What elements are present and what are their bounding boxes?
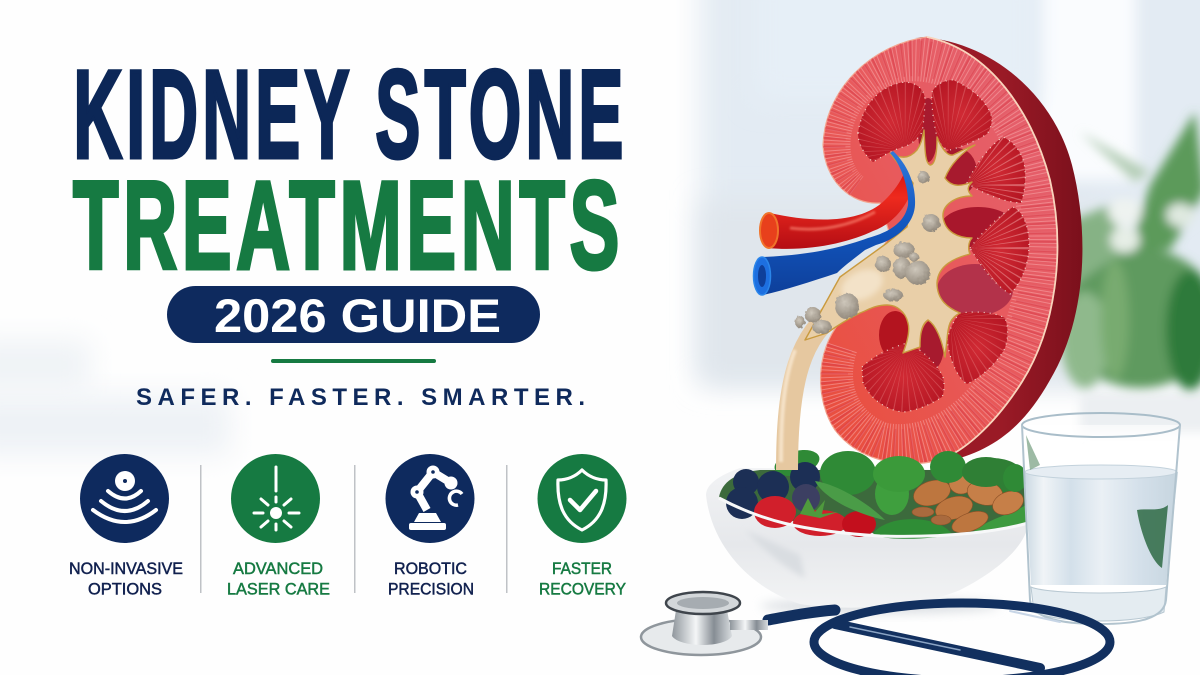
stethoscope: [641, 592, 1110, 675]
label: robotic precision: PRECISION: [388, 580, 474, 598]
label: non-invasive options: OPTIONS: [88, 580, 162, 598]
blueberries: [726, 462, 820, 519]
kidney cross-section: [754, 37, 1082, 470]
tagline: SAFER. FASTER. SMARTER.: [136, 384, 585, 411]
icon: ultrasound waves: [80, 454, 169, 543]
cream rim line: [927, 37, 1057, 460]
strawberries: [754, 496, 876, 537]
label: faster recovery: [539, 559, 626, 598]
ureter: [787, 308, 840, 470]
divider: [506, 465, 508, 593]
label: faster recovery: RECOVERY: [539, 580, 626, 598]
divider: [354, 465, 356, 593]
blurred plant: [1060, 112, 1200, 390]
renal pelvis: [805, 130, 975, 357]
glass of water: [1022, 413, 1180, 624]
label: advanced laser care: ADVANCED: [233, 559, 323, 578]
label: robotic precision: [388, 559, 474, 598]
badge: 2026 guide: [167, 286, 540, 343]
cortex radial hatch: [827, 58, 1041, 447]
renal vein: [754, 151, 915, 295]
medullary pyramids: [858, 80, 1029, 412]
label: advanced laser care: LASER CARE: [227, 580, 330, 598]
almonds: [910, 472, 1027, 537]
badge: 2026 guide: 2026 GUIDE: [214, 289, 501, 342]
chest piece: [641, 592, 768, 655]
spinach: [815, 473, 1026, 539]
icon: laser beam: [231, 454, 320, 543]
renal artery: [760, 170, 912, 249]
green accent rule: [271, 359, 436, 363]
feature: non-invasive options: [69, 454, 183, 598]
back leaves: [772, 445, 1025, 498]
icon: shield check: [538, 454, 626, 543]
feature: advanced laser care: [227, 454, 330, 598]
label: non-invasive options: [69, 559, 183, 598]
feature: faster recovery: [538, 454, 626, 598]
kidney back body: [880, 37, 1082, 462]
divider: [200, 465, 202, 593]
dark calyx pockets: [879, 98, 1016, 370]
feature: robotic precision: [386, 454, 474, 598]
label: robotic precision: ROBOTIC: [394, 559, 467, 578]
label: faster recovery: FASTER: [552, 559, 612, 578]
title: treatments: TREATMENTS: [73, 156, 624, 295]
front spinach leaves: [873, 451, 1027, 492]
tubing: [768, 603, 1110, 675]
kidney cut face: [821, 37, 1057, 464]
label: non-invasive options: NON-INVASIVE: [69, 559, 183, 578]
label: advanced laser care: [227, 559, 330, 598]
bowl of healthy food: [706, 445, 1028, 614]
title: kidney stone: KIDNEY STONE: [74, 45, 628, 185]
kidney stones: [795, 171, 940, 334]
icon: robot arm: [386, 454, 474, 543]
